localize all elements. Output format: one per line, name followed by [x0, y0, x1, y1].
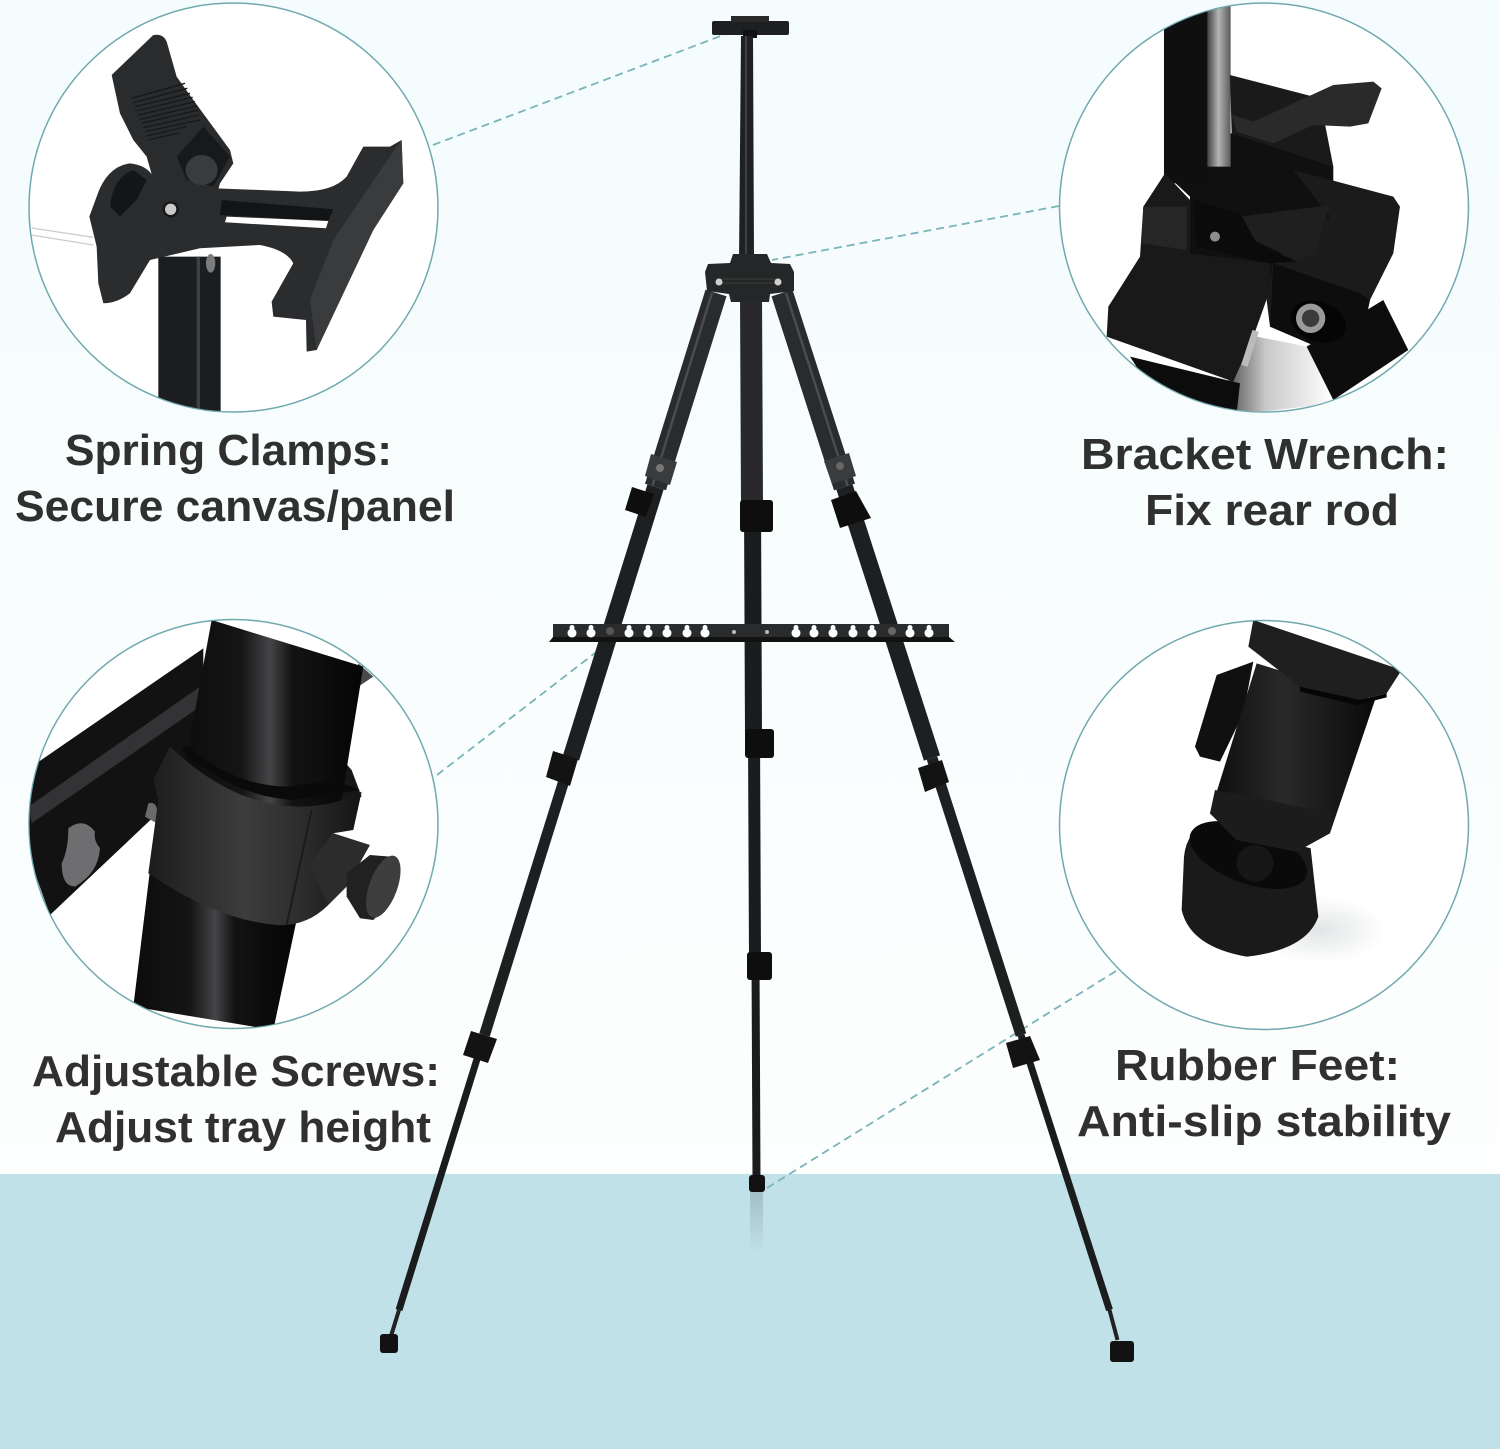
illustration: bracket wrench [1107, 0, 1408, 417]
label: adjustable screws: Adjustable Screws: [32, 1047, 440, 1096]
label: spring clamps: Spring Clamps: [65, 426, 392, 475]
label: bracket wrench: Bracket Wrench: [1081, 430, 1449, 479]
floor band [0, 1174, 1500, 1449]
left leg [380, 293, 716, 1353]
label: spring clamps: Secure canvas/panel [15, 482, 455, 531]
dashed callout connectors [433, 34, 1116, 1188]
label: rubber feet: Anti-slip stability [1077, 1097, 1452, 1146]
illustration: rubber foot [1181, 620, 1402, 963]
label: bracket wrench [1081, 430, 1449, 535]
label: adjustable screws [32, 1047, 440, 1152]
label: bracket wrench: Fix rear rod [1145, 486, 1399, 535]
center rear leg [740, 295, 774, 1192]
label: spring clamps [15, 426, 455, 531]
right leg [782, 293, 1134, 1362]
top canvas bracket [712, 16, 789, 38]
illustration: adjustable screw collar [27, 620, 408, 1030]
top hub [705, 254, 794, 302]
panel: spring clamps detail circle [29, 3, 438, 417]
panel: rubber feet detail circle [1060, 620, 1468, 1030]
illustration: spring clamp [32, 35, 403, 417]
tray ledge [549, 624, 955, 642]
center mast upper [739, 36, 754, 262]
label: rubber feet: Rubber Feet: [1115, 1041, 1400, 1090]
center foot reflection [750, 1192, 763, 1254]
label: adjustable screws: Adjust tray height [55, 1103, 431, 1152]
panel: bracket wrench detail circle [1060, 0, 1468, 417]
easel [380, 16, 1134, 1362]
panel: adjustable screws detail circle [27, 620, 438, 1030]
label: rubber feet [1077, 1041, 1452, 1146]
